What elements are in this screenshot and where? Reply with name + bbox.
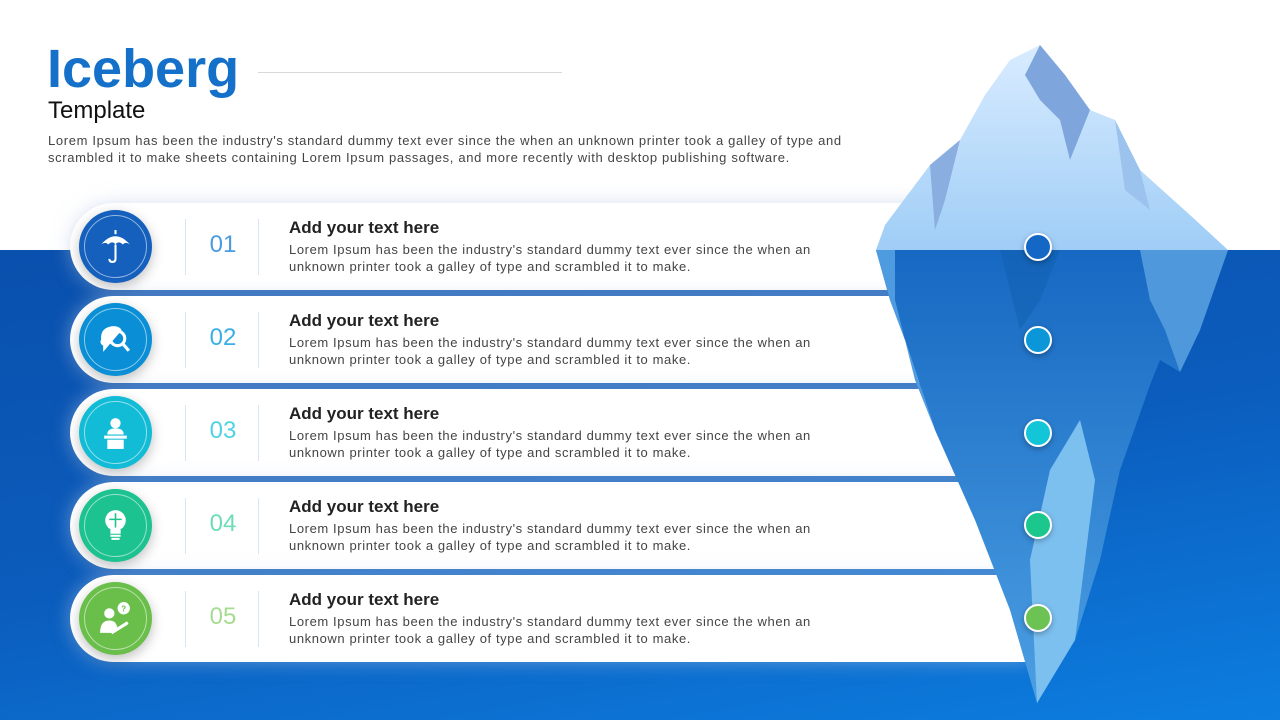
panel: row 05: Lorem Ipsum has been the industry's standard dummy text ever since the when an [289,614,811,629]
icon: umbrella [79,210,152,283]
panel: row 01: 01 [210,231,236,258]
panel: row 04 [70,482,1030,569]
panel: row 03: unknown printer took a galley of type and scrambled it to make. [289,445,691,460]
panel: row 03: 03 [210,417,236,444]
panel: row 01: Add your text here [289,218,439,237]
panel: row 02: Add your text here [289,311,439,330]
panel: row 05: unknown printer took a galley of type and scrambled it to make. [289,631,691,646]
panel: row 05: 05 [210,603,236,630]
panel: row 02: unknown printer took a galley of type and scrambled it to make. [289,352,691,367]
panel: row 01: Lorem Ipsum has been the industry's standard dummy text ever since the when an [289,242,811,257]
panel: row 01 [70,203,1030,290]
marker dots [1021,232,1055,637]
panel: row 05 [70,575,1030,662]
panel: row 04: Add your text here [289,497,439,516]
icon: head with magnifier [79,303,152,376]
panel: row 04: Lorem Ipsum has been the industry's standard dummy text ever since the when an [289,521,811,536]
panel: row 03: Lorem Ipsum has been the industry's standard dummy text ever since the when an [289,428,811,443]
panel: row 02 [70,296,1030,383]
panel: row 05: Add your text here [289,590,439,609]
intro text [48,133,842,165]
panel: row 03 [70,389,1030,476]
panel: row 04: 04 [210,510,236,537]
intro text: Lorem Ipsum has been the industry's standard dummy text ever since the when an unknown printer took a galley of type and [48,133,842,148]
panel: row 02: 02 [210,324,236,351]
panel: row 01: unknown printer took a galley of type and scrambled it to make. [289,259,691,274]
icon: lightbulb brain [79,489,152,562]
icon: person question: ? [121,604,126,613]
icon: speaker podium [79,396,152,469]
panel: row 02: Lorem Ipsum has been the industry's standard dummy text ever since the when an [289,335,811,350]
intro text: scrambled it to make sheets containing Lorem Ipsum passages, and more recently with desktop publishing software. [48,150,790,165]
panel: row 03: Add your text here [289,404,439,423]
icon: person question [79,582,152,655]
title: Iceberg [47,39,239,99]
subtitle: Template [48,97,145,124]
panel: row 04: unknown printer took a galley of type and scrambled it to make. [289,538,691,553]
